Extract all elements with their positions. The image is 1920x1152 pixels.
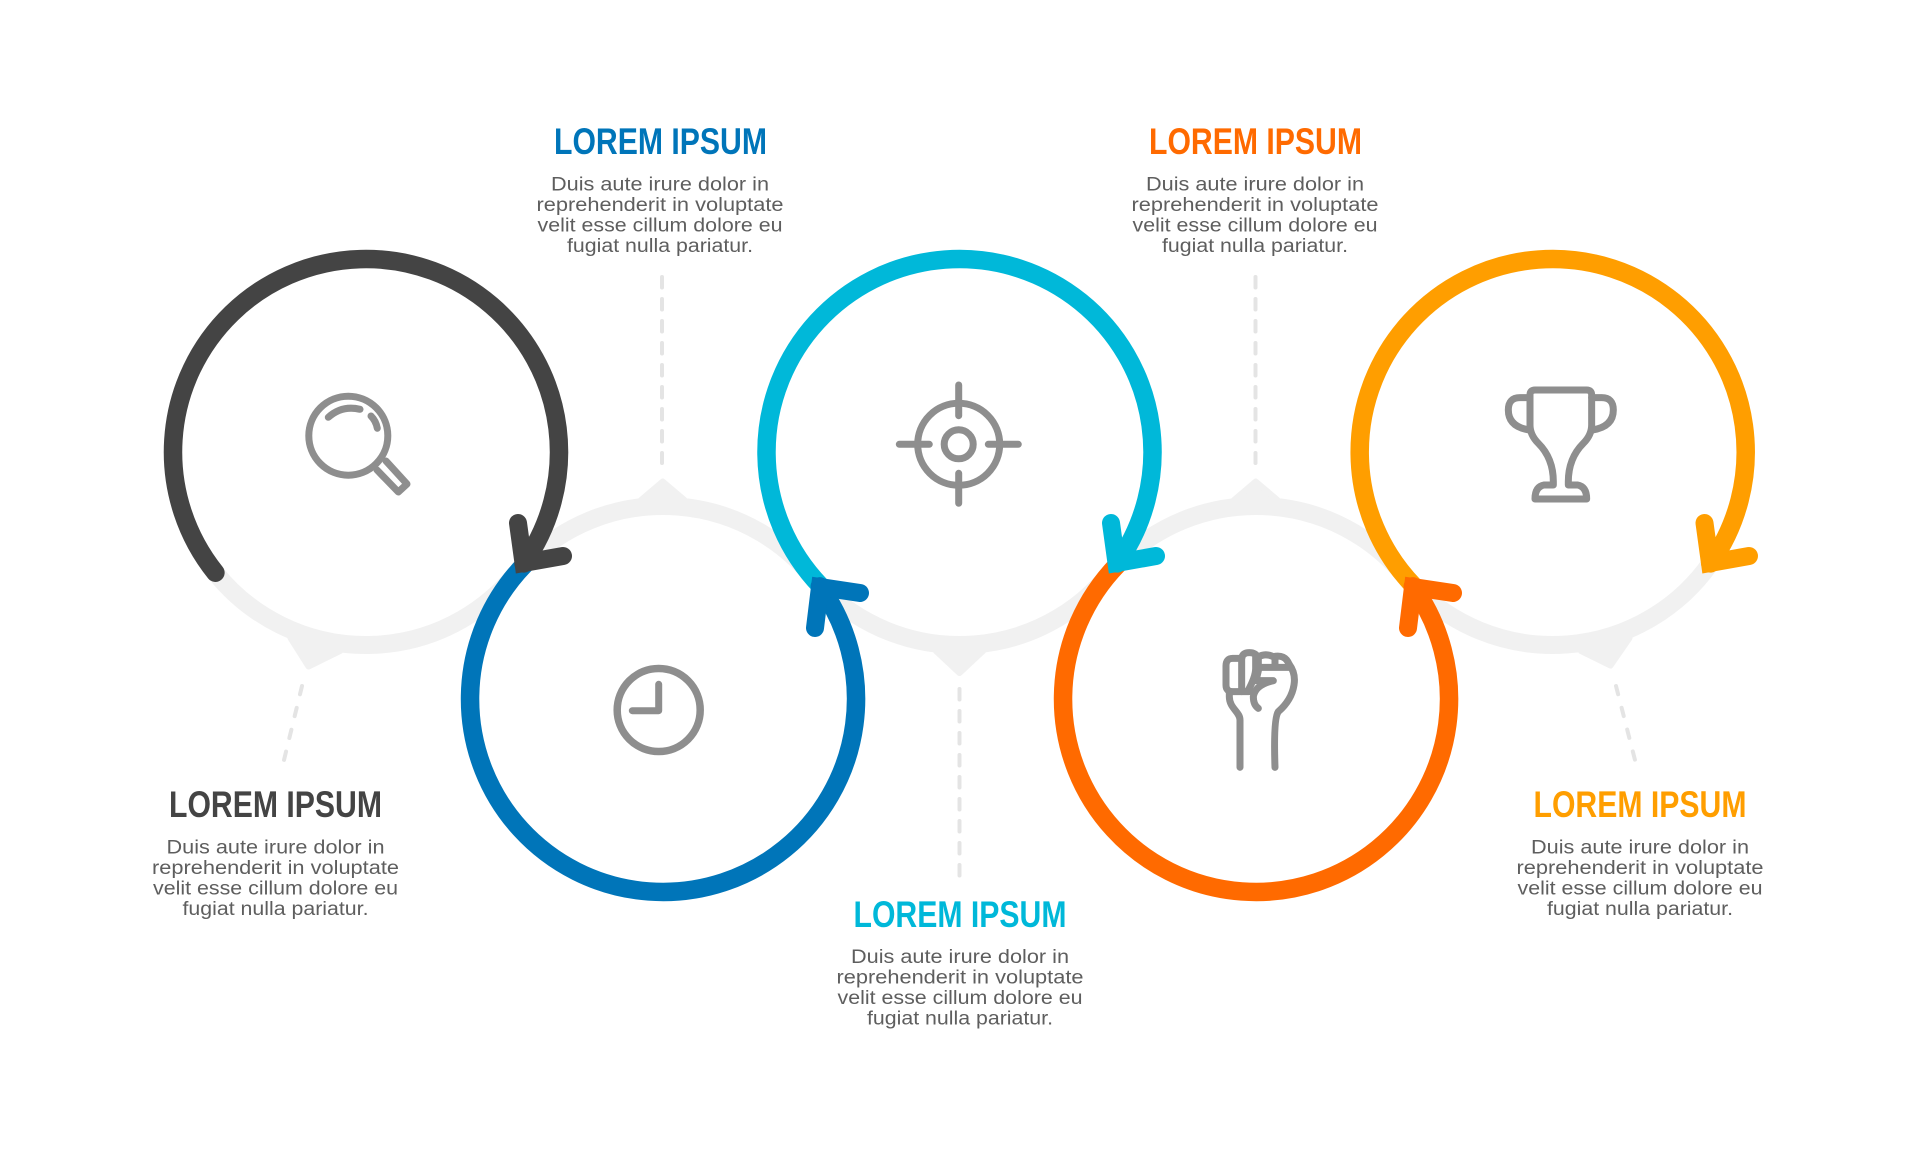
text block: step 1: Duis aute irure dolor in [166, 837, 384, 858]
dark circle arc: step 1 [173, 259, 559, 573]
icon: trophy [1508, 390, 1613, 499]
text block: step 1 [152, 837, 399, 920]
text block: step 3 [836, 947, 1084, 1029]
orange circle arc: step 4 [1063, 564, 1449, 892]
text block: step 1: fugiat nulla pariatur. [182, 899, 368, 920]
icon: raised fist [1226, 653, 1294, 767]
grey connector ring: step 1 [215, 563, 524, 666]
arrowhead: cyan [1111, 523, 1156, 563]
grey connector ring: step 3 [820, 563, 1117, 673]
text block: step 4 [1132, 174, 1378, 257]
text block: step 5: reprehenderit in voluptate [1516, 858, 1764, 879]
dashed leader line: step 4 [1254, 277, 1258, 463]
text block: step 2: reprehenderit in voluptate [536, 195, 784, 216]
text block: step 3: fugiat nulla pariatur. [867, 1008, 1053, 1029]
text block: step 2: Duis aute irure dolor in [551, 174, 769, 195]
heading: step 5: LOREM IPSUM [1534, 784, 1746, 825]
dashed leader line: step 2 [660, 277, 664, 463]
text block: step 2: fugiat nulla pariatur. [567, 236, 753, 257]
text block: step 3: velit esse cillum dolore eu [838, 988, 1082, 1009]
heading: step 3: LOREM IPSUM [854, 894, 1066, 935]
grey connector ring: step 2 [525, 482, 820, 586]
dashed leader line: step 5 [1616, 686, 1635, 760]
text block: step 5: Duis aute irure dolor in [1531, 837, 1749, 858]
icon: clock [617, 668, 700, 752]
blue circle arc: step 2 [470, 564, 856, 892]
icon: magnifying glass [309, 396, 407, 492]
grey connector ring: step 4 [1118, 482, 1413, 586]
arrowhead: orange [1408, 587, 1453, 628]
text block: step 3: Duis aute irure dolor in [851, 947, 1069, 968]
amber circle arc: step 5 [1360, 259, 1746, 586]
heading: step 1: LOREM IPSUM [169, 784, 382, 825]
arrowhead: dark [518, 523, 563, 563]
heading: step 2: LOREM IPSUM [554, 121, 767, 162]
text block: step 4: Duis aute irure dolor in [1146, 174, 1364, 195]
dashed leader line: step 1 [284, 686, 302, 760]
text block: step 4: reprehenderit in voluptate [1132, 195, 1378, 216]
text block: step 1: reprehenderit in voluptate [152, 858, 399, 879]
text block: step 2: velit esse cillum dolore eu [538, 215, 782, 236]
heading: step 4: LOREM IPSUM [1149, 121, 1362, 162]
text block: step 4: velit esse cillum dolore eu [1132, 215, 1378, 236]
text block: step 1: velit esse cillum dolore eu [153, 878, 398, 899]
grey connector ring: step 5 [1414, 563, 1710, 666]
text block: step 5: fugiat nulla pariatur. [1547, 899, 1733, 920]
arrowhead: amber [1704, 523, 1749, 563]
text block: step 3: reprehenderit in voluptate [836, 967, 1084, 988]
arrowhead: blue [815, 587, 860, 628]
text block: step 2 [536, 174, 784, 257]
text block: step 5: velit esse cillum dolore eu [1518, 878, 1762, 899]
icon: target crosshair [899, 385, 1018, 503]
cyan circle arc: step 3 [766, 259, 1152, 586]
text block: step 4: fugiat nulla pariatur. [1162, 236, 1348, 257]
text block: step 5 [1516, 837, 1764, 920]
dashed leader line: step 3 [958, 689, 962, 876]
